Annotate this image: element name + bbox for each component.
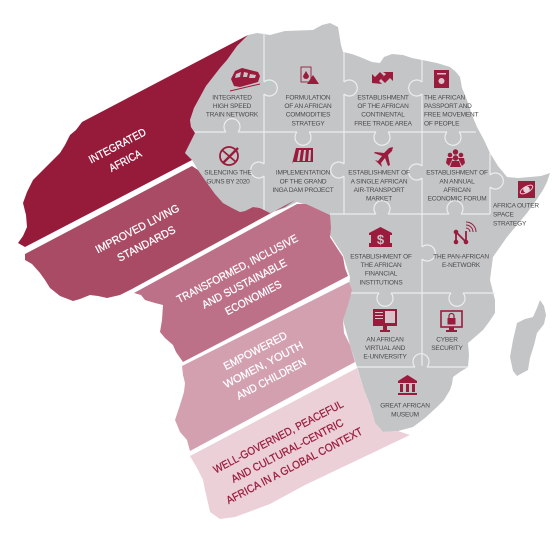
caption: integrated high speed train network: INTEGRATED (212, 94, 252, 102)
caption: financial institutions: FINANCIAL (365, 271, 398, 278)
caption: African passport: OF PEOPLE (424, 120, 460, 127)
caption: outer space strategy: SPACE (493, 212, 514, 218)
labels: project captions (204, 94, 539, 418)
band 4: Empowered Women, Youth and Children: EMPOWERED (222, 330, 289, 373)
icon: passport (434, 70, 449, 88)
band 5: Well-governed, Peaceful and Cultural-centric Africa: AND CULTURAL-CENTRIC (229, 417, 346, 486)
caption: continental free trade area: CONTINENTAL (361, 112, 405, 119)
caption: cyber security: SECURITY (431, 345, 464, 352)
caption: virtual university: VIRTUAL AND (365, 345, 406, 352)
band 1: Integrated Africa: AFRICA (107, 148, 144, 175)
caption: African passport: PASSPORT AND (424, 103, 472, 110)
band 3: Transformed, Inclusive and Sustainable Economies: AND SUSTAINABLE (200, 257, 289, 311)
puzzle grid lines (191, 33, 503, 367)
caption: financial institutions: THE AFRICAN (360, 262, 402, 269)
icon: outer space planet (518, 181, 535, 198)
caption: financial institutions: ESTABLISHMENT OF (350, 254, 412, 260)
caption: continental free trade area: ESTABLISHMENT (357, 94, 409, 102)
caption: e-network: THE PAN-AFRICAN (433, 254, 489, 260)
caption: economic forum: ESTABLISHMENT OF (426, 170, 488, 176)
caption: great African museum: MUSEUM (391, 412, 419, 418)
caption: Grand Inga Dam: INGA DAM PROJECT (272, 187, 334, 194)
band 4: Empowered Women, Youth and Children: WOMEN, YOUTH (222, 340, 305, 391)
Madagascar (510, 300, 546, 376)
caption: silencing the guns: SILENCING THE (204, 170, 252, 176)
band 2: Improved Living Standards (25, 166, 295, 301)
caption: integrated high speed train network: TRAIN NETWORK (206, 112, 259, 119)
icon: commodities (301, 67, 319, 84)
caption: African passport: THE AFRICAN (424, 94, 465, 102)
icon: cyber security monitor (441, 311, 462, 332)
band 4: Empowered Women, Youth and Children: AND CHILDREN (235, 356, 309, 402)
caption: economic forum: AFRICAN (443, 187, 471, 194)
band 1: Integrated Africa (18, 35, 248, 247)
band 3: Transformed, Inclusive and Sustainable Economies: ECONOMIES (223, 279, 284, 318)
icon: museum (398, 375, 417, 395)
caption: great African museum: GREAT AFRICAN (380, 402, 430, 410)
band 5: Well-governed, Peaceful and Cultural-centric Africa: WELL-GOVERNED, PEACEFUL (212, 398, 346, 476)
caption: commodities strategy: STRATEGY (291, 120, 325, 127)
caption: single air-transport market: ESTABLISHMENT OF (348, 170, 410, 176)
band 2: Improved Living Standards: STANDARDS (115, 224, 178, 264)
band 3: Transformed, Inclusive and Sustainable Economies (134, 204, 348, 362)
caption: single air-transport market: A SINGLE AFRICAN (351, 178, 408, 186)
icon: silencing the guns (220, 147, 238, 165)
caption: economic forum: ECONOMIC FORUM (428, 196, 486, 202)
icon: network with signal (454, 222, 476, 244)
icon: bank with dollar sign: $ (377, 232, 385, 247)
caption: economic forum: AN ANNUAL (439, 178, 475, 186)
caption: outer space strategy: STRATEGY (493, 220, 527, 227)
caption: outer space strategy: AFRICA OUTER (493, 202, 539, 210)
icon: Inga dam (292, 148, 313, 164)
caption: integrated high speed train network: HIGH SPEED (213, 103, 252, 110)
caption: single air-transport market: AIR-TRANSPORT (354, 187, 405, 194)
mainland grey shape (185, 23, 550, 432)
caption: virtual university: E-UNIVERSITY (363, 354, 408, 361)
band 1: Integrated Africa: INTEGRATED (87, 126, 148, 166)
band 5: Well-governed, Peaceful and Cultural-centric Africa: AFRICA IN A GLOBAL CONTEXT (224, 426, 365, 507)
map of Africa: grey puzzle region (185, 23, 550, 432)
caption: cyber security: CYBER (436, 336, 458, 344)
band 2: Improved Living Standards: IMPROVED LIVING (94, 202, 182, 256)
caption: commodities strategy: OF AN AFRICAN (284, 103, 332, 110)
caption: single air-transport market: MARKET (366, 196, 392, 202)
caption: financial institutions: INSTITUTIONS (360, 280, 403, 286)
caption: commodities strategy: COMMODITIES (286, 112, 331, 119)
icon: virtual university monitor (373, 309, 397, 332)
icon: free trade arrows (372, 72, 393, 84)
caption: continental free trade area: FREE TRADE AREA (354, 120, 413, 127)
band 4: Empowered Women, Youth and Children (175, 282, 355, 451)
caption: commodities strategy: FORMULATION (286, 94, 330, 102)
caption: e-network: E-NETWORK (442, 262, 481, 269)
caption: Grand Inga Dam: OF THE GRAND (280, 178, 327, 186)
band 3: Transformed, Inclusive and Sustainable Economies: TRANSFORMED, INCLUSIVE (175, 233, 300, 306)
caption: virtual university: AN AFRICAN (366, 336, 404, 344)
band 5: Well-governed, Peaceful and Cultural-centric Africa (190, 368, 410, 519)
caption: Grand Inga Dam: IMPLEMENTATION (276, 170, 330, 176)
caption: continental free trade area: OF THE AFRICAN (357, 103, 409, 110)
icon: high speed train (230, 68, 260, 91)
caption: African passport: FREE MOVEMENT (424, 112, 479, 119)
icon: airplane (374, 147, 393, 167)
icon: bank with dollar sign (369, 227, 392, 247)
icon: group of people (446, 149, 465, 167)
caption: silencing the guns: GUNS BY 2020 (206, 178, 250, 186)
